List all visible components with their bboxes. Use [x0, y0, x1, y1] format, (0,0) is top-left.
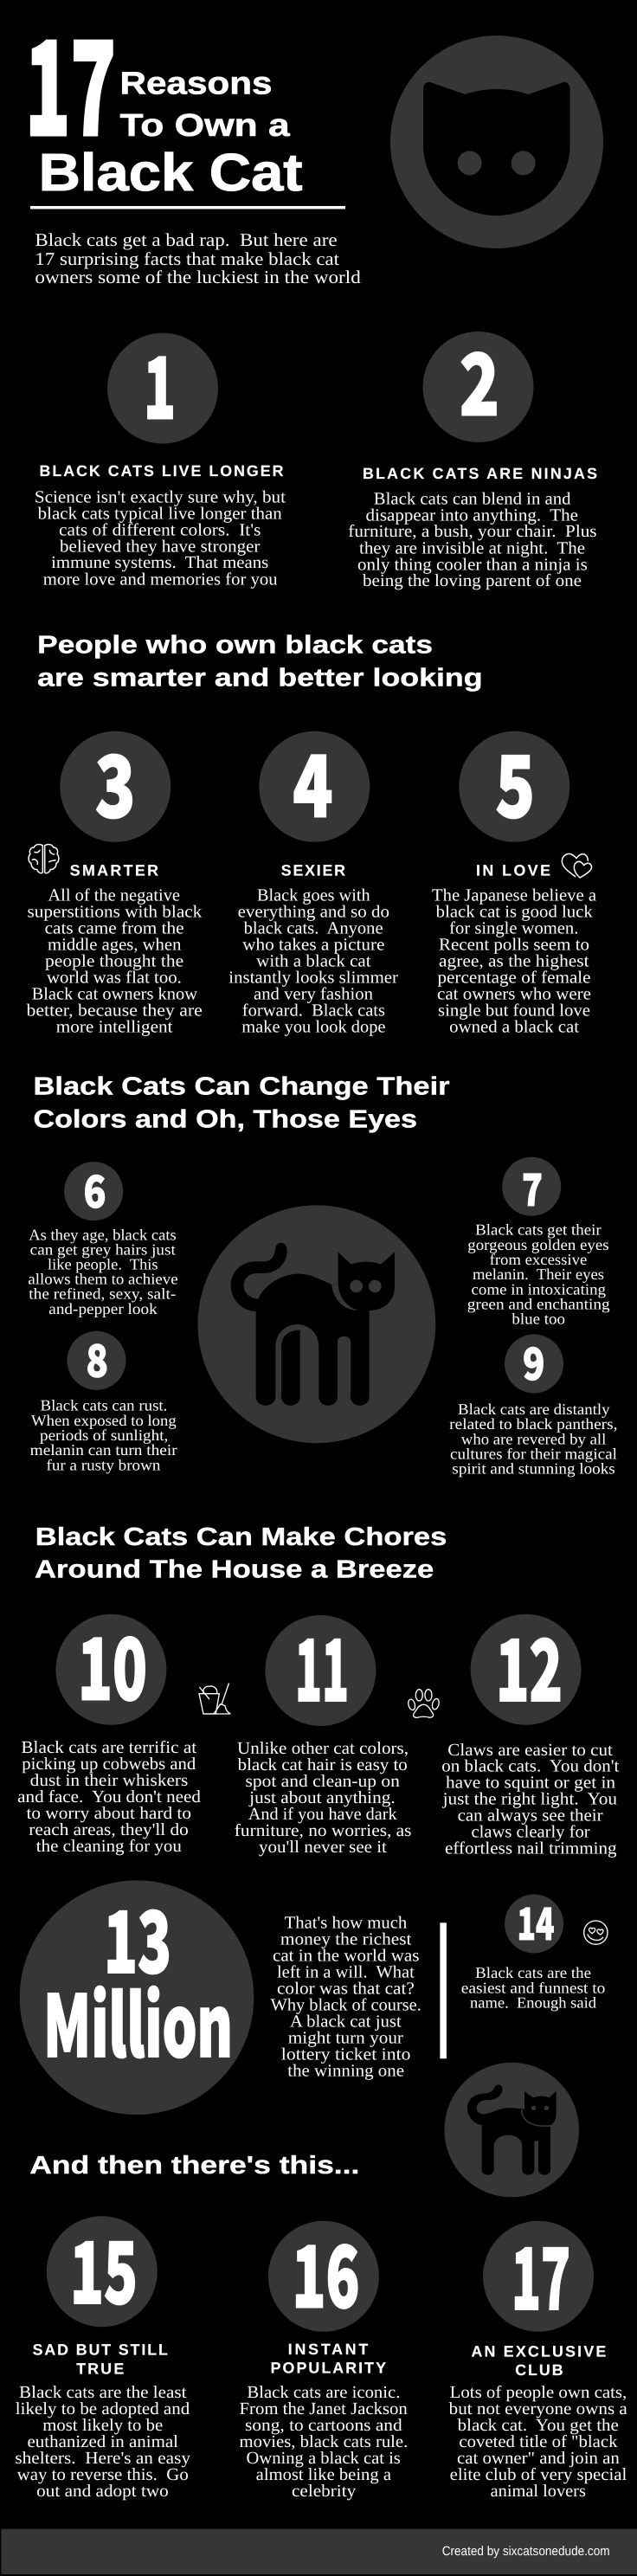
- intro text: [35, 229, 361, 287]
- heading: instant popularity: [271, 2341, 386, 2377]
- body text 9: cultures for their magical: [450, 1445, 617, 1462]
- body text 16: celebrity: [292, 2482, 356, 2501]
- body text 4: everything and so do: [238, 903, 389, 922]
- heading: black cats live longer: BLACK CATS LIVE LONGER: [40, 462, 284, 480]
- body text 17: but not everyone owns a: [449, 2399, 627, 2418]
- title line: To Own a: To Own a: [119, 107, 290, 143]
- icon: standing black cat in large circle: [197, 1205, 435, 1443]
- heading: an exclusive club: [471, 2342, 606, 2379]
- section heading: smarter and better looking: [37, 631, 483, 692]
- body text 4: instantly looks slimmer: [228, 969, 398, 988]
- body text 1: Science isn't exactly sure why, but: [35, 487, 286, 506]
- body text 2: being the loving parent of one: [363, 571, 582, 590]
- body text 5: [432, 886, 596, 1037]
- body text 8: fur a rusty brown: [47, 1456, 160, 1473]
- body text 9: [449, 1401, 618, 1478]
- body text 2: Black cats can blend in and: [374, 490, 571, 509]
- body text 16: Owning a black cat is: [246, 2449, 401, 2468]
- number badge 5: 5: [495, 719, 535, 842]
- body text 15: [15, 2383, 190, 2501]
- icon: heart-eyes smiley: [584, 1921, 608, 1944]
- section heading: chores: [35, 1523, 447, 1584]
- heading: sexier: SEXIER: [281, 862, 345, 879]
- panel: reason 9: [449, 1329, 618, 1478]
- stat badge: 13 Million: 13: [104, 1875, 171, 1998]
- body text 3: Black cat owners know: [32, 985, 198, 1004]
- body text 12: claws clearly for: [471, 1823, 590, 1842]
- body text 15: out and adopt two: [36, 2482, 169, 2501]
- number badge 11: [265, 1603, 376, 1726]
- body text 4: Black goes with: [257, 886, 370, 905]
- intro text: 17 surprising facts that make black cat: [35, 248, 339, 269]
- icon: cat face in circle: [390, 35, 603, 248]
- number badge 8: 8: [87, 1326, 108, 1390]
- body text 8: When exposed to long: [31, 1412, 177, 1429]
- number badge 10: 10: [78, 1602, 147, 1725]
- body text 1: believed they have stronger: [60, 537, 261, 556]
- body text 6: [28, 1226, 178, 1317]
- body text 6: allows them to achieve: [28, 1271, 178, 1288]
- section heading: change their colors: [33, 1072, 450, 1133]
- footer credit: Created by sixcatsonedude.com: [442, 2544, 610, 2559]
- number badge 9: 9: [523, 1329, 545, 1393]
- body text 12: just the right light. You: [442, 1790, 617, 1809]
- body text 11: you'll never see it: [259, 1838, 387, 1857]
- footer: [1, 2529, 637, 2574]
- body text 17: animal lovers: [491, 2482, 586, 2501]
- number badge 7: [502, 1155, 561, 1219]
- panel: reason 7: [467, 1155, 610, 1327]
- body text 13: cat in the world was: [273, 1946, 420, 1965]
- body text 4: forward. Black cats: [242, 1001, 385, 1021]
- body text 10: Black cats are terrific at: [21, 1738, 197, 1757]
- body text 14: name. Enough said: [470, 1993, 596, 2011]
- number badge 16: 16: [293, 2210, 360, 2333]
- section heading: chores: Black Cats Can Make Chores: [35, 1523, 447, 1551]
- body text 7: melanin. Their eyes: [473, 1265, 604, 1283]
- body text 7: come in intoxicating: [471, 1280, 606, 1298]
- panel: reason 6: [28, 1156, 178, 1317]
- body text 12: can always see their: [458, 1806, 603, 1826]
- body text 9: Black cats are distantly: [458, 1401, 610, 1418]
- number badge 2: 2: [460, 317, 499, 440]
- body text 16: Black cats are iconic.: [247, 2383, 400, 2402]
- stat badge: 13 Million: Million: [43, 1959, 233, 2082]
- section heading: chores: Around The House a Breeze: [35, 1556, 434, 1584]
- panel: reason 11: [235, 1603, 440, 1857]
- body text 4: who takes a picture: [242, 936, 385, 955]
- panel: reason 4: [228, 718, 398, 1037]
- body text 11: black cat hair is easy to: [238, 1755, 408, 1774]
- body text 13: might turn your: [288, 2028, 403, 2047]
- body text 3: [26, 886, 203, 1037]
- panel: reason 14: [461, 1889, 608, 2011]
- body text 15: way to reverse this. Go: [17, 2465, 189, 2484]
- body text 16: almost like being a: [256, 2465, 391, 2484]
- body text 5: agree, as the highest: [439, 952, 589, 971]
- body text 8: Black cats can rust.: [40, 1397, 167, 1414]
- body text 2: disappear into anything. The: [365, 506, 578, 525]
- icon: brain: [29, 844, 59, 873]
- body text 14: easiest and funnest to: [461, 1979, 605, 1996]
- body text 5: cat owners who were: [437, 985, 591, 1004]
- body text 5: Recent polls seem to: [439, 936, 589, 955]
- body text 7: gorgeous golden eyes: [467, 1236, 609, 1253]
- body text 10: [17, 1738, 201, 1856]
- body text 17: Lots of people own cats,: [450, 2383, 627, 2402]
- number badge 2: [422, 317, 533, 442]
- heading: instant popularity: INSTANT: [288, 2341, 368, 2358]
- body text 3: more intelligent: [56, 1018, 173, 1037]
- body text 5: for single women.: [449, 919, 578, 938]
- heading: instant popularity: POPULARITY: [271, 2360, 386, 2377]
- body text 11: [235, 1739, 412, 1857]
- body text 13: color was that cat?: [277, 1979, 415, 1998]
- body text 14: Black cats are the: [475, 1964, 591, 1981]
- body text 12: on black cats. You don't: [441, 1757, 620, 1776]
- body text 17: [449, 2383, 627, 2501]
- body text 7: from excessive: [490, 1251, 587, 1268]
- body text 11: just about anything.: [248, 1788, 396, 1807]
- body text 15: likely to be adopted and: [16, 2399, 190, 2418]
- body text 17: coveted title of "black: [459, 2432, 618, 2451]
- body text 5: percentage of female: [438, 969, 591, 988]
- heading: an exclusive club: AN EXCLUSIVE: [471, 2342, 606, 2360]
- heading: in love: IN LOVE: [476, 862, 550, 879]
- section heading: smarter and better looking: are smarter and better looking: [37, 664, 483, 692]
- body text 3: better, because they are: [26, 1001, 203, 1021]
- panel: reason 3: [26, 719, 203, 1037]
- icon: paw print: [407, 1690, 440, 1717]
- body text 13: Why black of course.: [271, 1995, 421, 2014]
- panel: reason 1: [35, 321, 286, 589]
- body text 4: make you look dope: [241, 1018, 386, 1037]
- number badge 9: [505, 1329, 563, 1394]
- panel: reason 12: [441, 1603, 620, 1858]
- title block: [25, 0, 345, 209]
- intro text: Black cats get a bad rap. But here are: [35, 229, 338, 250]
- body text 17: elite club of very special: [450, 2465, 627, 2484]
- body text 4: [228, 886, 398, 1037]
- body text 3: superstitions with black: [28, 903, 202, 922]
- number badge 3: 3: [95, 719, 135, 842]
- body text 10: picking up cobwebs and: [22, 1755, 196, 1774]
- body text 3: cats came from the: [45, 919, 184, 938]
- body text 7: Black cats get their: [475, 1221, 602, 1239]
- body text 5: The Japanese believe a: [432, 886, 596, 905]
- section heading: change their colors: Colors and Oh, Those Eyes: [33, 1105, 417, 1133]
- body text 1: cats of different colors. It's: [59, 520, 261, 539]
- body text 7: [467, 1221, 610, 1327]
- number badge 4: [259, 718, 370, 842]
- body text 2: they are invisible at night. The: [359, 538, 585, 557]
- icon: small black cat in circle: [444, 2063, 579, 2197]
- body text 12: have to squint or get in: [446, 1774, 615, 1793]
- number badge 5: [459, 719, 569, 842]
- panel: reason 8: [30, 1326, 177, 1473]
- body text 16: [239, 2383, 408, 2501]
- body text 5: black cat is good luck: [436, 903, 593, 922]
- body text 6: like people. This: [48, 1256, 158, 1273]
- body text 1: immune systems. That means: [51, 553, 269, 572]
- heading: sad but still true: [33, 2341, 168, 2377]
- body text 2: only thing cooler than a ninja is: [357, 555, 588, 574]
- body text 17: cat owner" and join an: [457, 2449, 620, 2468]
- body text 1: more love and memories for you: [43, 570, 278, 589]
- intro text: owners some of the luckiest in the world: [35, 267, 361, 287]
- number badge 14: 14: [518, 1889, 554, 1953]
- number badge 1: 1: [144, 321, 176, 444]
- body text 10: the cleaning for you: [36, 1837, 182, 1856]
- body text 13: That's how much: [285, 1913, 407, 1932]
- body text 8: periods of sunlight,: [40, 1426, 168, 1444]
- panel: reason 13: [20, 1875, 421, 2115]
- body text 11: And if you have dark: [248, 1805, 397, 1824]
- body text 14: [461, 1964, 605, 2011]
- panel: reason 2: [348, 317, 597, 590]
- body text 11: Unlike other cat colors,: [237, 1739, 409, 1758]
- body text 2: [348, 490, 597, 590]
- body text 13: the winning one: [287, 2061, 404, 2080]
- body text 15: euthanized in animal: [28, 2432, 178, 2451]
- number badge 3: [60, 719, 171, 842]
- number badge 1: [107, 321, 218, 444]
- body text 13: left in a will. What: [277, 1962, 415, 1981]
- body text 4: with a black cat: [256, 952, 371, 971]
- body text 7: green and enchanting: [467, 1295, 610, 1312]
- body text 13: lottery ticket into: [281, 2045, 410, 2064]
- body text 3: middle ages, when: [48, 936, 181, 955]
- body text 2: furniture, a bush, your chair. Plus: [348, 522, 597, 541]
- body text 17: black cat. You get the: [458, 2416, 619, 2435]
- body text 16: From the Janet Jackson: [239, 2399, 408, 2418]
- title line: Reasons: Reasons: [119, 66, 272, 100]
- body text 4: black cats. Anyone: [244, 919, 383, 938]
- number badge 17: 17: [512, 2212, 570, 2334]
- body text 6: As they age, black cats: [29, 1226, 177, 1243]
- number badge 7: 7: [522, 1155, 543, 1219]
- number badge 12: [471, 1603, 582, 1726]
- body text 13: [271, 1913, 421, 2080]
- body text 11: spot and clean-up on: [246, 1772, 400, 1791]
- body text 8: melanin can turn their: [30, 1441, 177, 1459]
- title underline: [30, 206, 345, 209]
- body text 8: [30, 1397, 177, 1473]
- body text 10: and face. You don't need: [17, 1787, 201, 1806]
- number badge 15: [47, 2206, 158, 2328]
- heading: smarter: SMARTER: [70, 862, 158, 879]
- body text 12: Claws are easier to cut: [447, 1741, 613, 1760]
- body text 10: reach areas, they'll do: [29, 1820, 189, 1839]
- number badge 6: [64, 1156, 123, 1220]
- section heading: smarter and better looking: People who own black cats: [37, 631, 433, 659]
- body text 12: [441, 1741, 620, 1858]
- body text 13: A black cat just: [290, 2012, 402, 2031]
- icon: bucket and mop: [199, 1684, 230, 1714]
- number badge 12: 12: [496, 1603, 563, 1726]
- stat badge: 13 Million: [20, 1875, 254, 2115]
- number badge 14: [505, 1889, 563, 1953]
- body text 9: who are revered by all: [461, 1430, 606, 1447]
- panel: reason 17: [449, 2212, 627, 2501]
- body text 4: and very fashion: [254, 985, 373, 1004]
- heading: sad but still true: SAD BUT STILL: [33, 2341, 168, 2359]
- panel: reason 15: [15, 2206, 190, 2501]
- body text 5: single but found love: [438, 1001, 590, 1021]
- body text 15: shelters. Here's an easy: [15, 2449, 190, 2468]
- number badge 16: [268, 2210, 379, 2333]
- body text 3: world was flat too.: [47, 969, 182, 988]
- body text 13: money the richest: [280, 1929, 412, 1948]
- body text 7: blue too: [512, 1310, 565, 1327]
- body text 12: effortless nail trimming: [445, 1839, 617, 1858]
- body text 16: movies, black cats rule.: [239, 2432, 408, 2451]
- body text 16: song, to cartoons and: [245, 2416, 402, 2435]
- number badge 15: 15: [70, 2206, 138, 2328]
- body text 15: Black cats are the least: [19, 2383, 187, 2402]
- body text 3: All of the negative: [48, 886, 180, 905]
- panel: reason 5: [432, 719, 596, 1037]
- section heading: and then there's this: And then there's this...: [29, 2152, 359, 2180]
- panel: reason 10: [17, 1602, 230, 1856]
- title line: Black Cat: Black Cat: [39, 143, 303, 202]
- body text 3: people thought the: [45, 952, 183, 971]
- number badge 17: [483, 2212, 594, 2334]
- number badge 8: [68, 1326, 126, 1390]
- body text 1: [35, 487, 286, 589]
- body text 6: the refined, sexy, salt-: [29, 1285, 176, 1303]
- body text 6: can get grey hairs just: [30, 1241, 176, 1259]
- icon: hearts: [562, 853, 592, 878]
- body text 9: spirit and stunning looks: [452, 1460, 615, 1478]
- heading: black cats are ninjas: BLACK CATS ARE NINJAS: [363, 465, 597, 482]
- panel: reason 16: [239, 2210, 408, 2501]
- heading: an exclusive club: CLUB: [515, 2361, 563, 2379]
- body text 9: related to black panthers,: [449, 1415, 618, 1433]
- body text 5: owned a black cat: [449, 1018, 579, 1037]
- heading: sad but still true: TRUE: [76, 2360, 124, 2377]
- body text 1: black cats typical live longer than: [38, 504, 282, 523]
- body text 15: most likely to be: [42, 2416, 163, 2435]
- section heading: change their colors: Black Cats Can Change Their: [33, 1072, 450, 1100]
- body text 10: to worry about hard to: [26, 1804, 191, 1823]
- body text 11: furniture, no worries, as: [235, 1821, 412, 1840]
- number badge 11: 11: [295, 1603, 349, 1726]
- number badge 4: 4: [293, 718, 332, 841]
- body text 10: dust in their whiskers: [30, 1771, 189, 1790]
- body text 6: and-pepper look: [48, 1300, 158, 1317]
- number badge 6: 6: [83, 1156, 106, 1220]
